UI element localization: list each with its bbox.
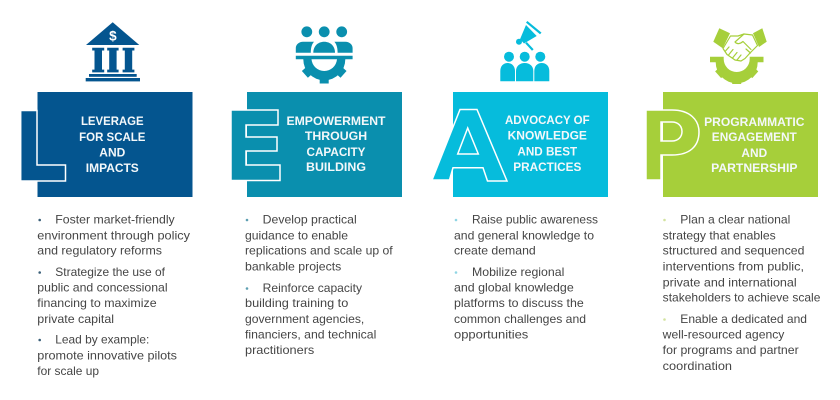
heading: leverage: LEVERAGE [81, 116, 144, 128]
bullet list: advocacy: opportunities [454, 327, 528, 341]
header box: advocacy [453, 92, 608, 197]
bullet list: leverage [37, 213, 190, 378]
bullet list: programmatic: private and international [663, 276, 797, 290]
bullet list: leverage: private capital [37, 312, 114, 326]
icon: team and gear [296, 26, 353, 83]
heading: advocacy: ADVOCACY OF [505, 115, 590, 127]
bullet list: empowerment: guidance to enable [245, 228, 348, 242]
heading: advocacy: AND BEST [517, 147, 577, 159]
bullet list: programmatic: well-resourced agency [662, 327, 784, 341]
panel: empowerment [231, 26, 402, 357]
bullet list: empowerment [245, 213, 393, 357]
icon: megaphone and audience [500, 21, 549, 81]
bullet list: empowerment: government agencies, [245, 312, 364, 326]
heading: leverage: FOR SCALE [79, 132, 146, 144]
bullet list: advocacy: platforms to discuss the [454, 296, 584, 310]
header box: programmatic [663, 92, 818, 197]
bullet list: leverage: Lead by example: [55, 333, 149, 347]
bullet list: programmatic: coordination [663, 359, 732, 373]
letter A [432, 110, 507, 181]
bullet list: empowerment: Reinforce capacity [263, 281, 362, 295]
heading: empowerment [286, 116, 386, 174]
bullet list: leverage: financing to maximize [37, 296, 157, 310]
heading: leverage: IMPACTS [86, 163, 139, 175]
heading: empowerment: CAPACITY [306, 147, 366, 159]
bullet list: programmatic: structured and sequenced [663, 244, 804, 258]
letter E [231, 110, 280, 180]
heading: leverage: AND [99, 148, 125, 160]
bullet list: leverage: and regulatory reforms [37, 244, 162, 258]
bullet list: empowerment: building training to [245, 296, 349, 310]
heading: advocacy: PRACTICES [513, 162, 582, 174]
header box: leverage [38, 92, 192, 197]
bullet list: empowerment: financiers, and technical [245, 327, 376, 341]
bullet list: leverage: Foster market-friendly [55, 213, 175, 227]
bullet list: leverage: public and concessional [37, 281, 168, 295]
heading: empowerment: THROUGH [305, 131, 367, 143]
bullet list: programmatic: strategy that enables [663, 228, 776, 242]
bullet list: advocacy [454, 213, 598, 341]
bullet list: programmatic: for programs and partner [663, 343, 799, 357]
heading: advocacy: KNOWLEDGE [508, 131, 587, 143]
heading: programmatic: PROGRAMMATIC [704, 117, 804, 129]
bullet list: empowerment: Develop practical [263, 213, 357, 227]
letter P [646, 110, 699, 180]
bullet list: advocacy: and general knowledge to [454, 228, 594, 242]
icon: bank [86, 22, 140, 81]
bullet list: empowerment: bankable projects [245, 260, 341, 274]
heading: leverage [79, 116, 146, 175]
header box: empowerment [247, 92, 402, 197]
bullet list: programmatic: Plan a clear national [680, 213, 790, 227]
bullet list: leverage: promote innovative pilots [37, 349, 177, 363]
bullet list: leverage: environment through policy [37, 228, 190, 242]
panel: leverage [21, 22, 193, 378]
heading: programmatic: PARTNERSHIP [711, 163, 798, 175]
heading: empowerment: BUILDING [306, 162, 366, 174]
letter L [21, 110, 66, 181]
heading: empowerment: EMPOWERMENT [286, 116, 386, 128]
bullet list: advocacy: Raise public awareness [472, 213, 598, 227]
bullet list: programmatic: Enable a dedicated and [680, 312, 807, 326]
heading: programmatic [704, 117, 804, 175]
bullet list: programmatic: stakeholders to achieve scale [663, 291, 821, 305]
bullet list: programmatic: interventions from public, [663, 260, 804, 274]
bullet list: empowerment: practitioners [245, 343, 314, 357]
bullet list: empowerment: replications and scale up of [245, 244, 393, 258]
bullet list: advocacy: common challenges and [454, 312, 586, 326]
panel: programmatic [646, 28, 821, 373]
heading: programmatic: ENGAGEMENT [712, 132, 797, 144]
bullet list: leverage: Strategize the use of [55, 265, 166, 279]
heading: programmatic: AND [741, 148, 767, 160]
icon: bank: $ [109, 28, 117, 44]
bullet list: leverage: for scale up [37, 364, 99, 378]
bullet list: advocacy: create demand [454, 244, 536, 258]
bullet list: advocacy: Mobilize regional [472, 265, 564, 279]
panel: advocacy [432, 21, 608, 341]
heading: advocacy [505, 115, 590, 174]
icon: handshake and gear [710, 28, 767, 84]
bullet list: advocacy: and global knowledge [454, 281, 574, 295]
bullet list: programmatic [662, 213, 821, 373]
